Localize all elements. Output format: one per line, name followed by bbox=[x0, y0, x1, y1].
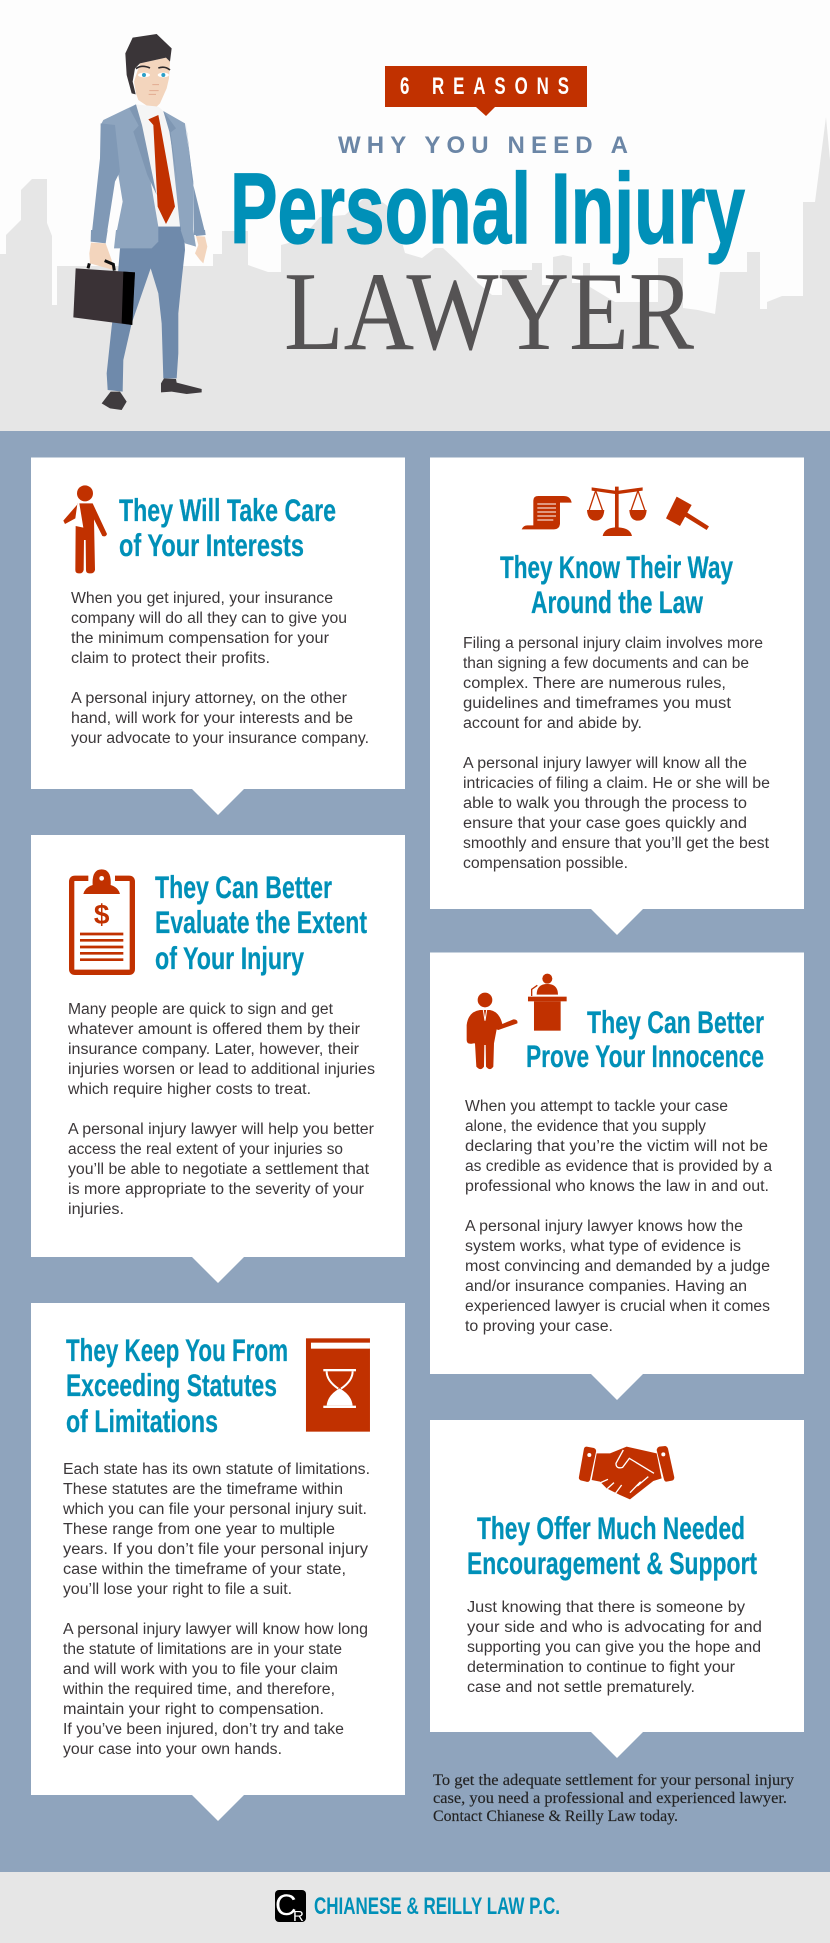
body text: to proving your case. bbox=[465, 1318, 613, 1335]
body text bbox=[67, 1001, 375, 1218]
closing text: case, you need a professional and experienced lawyer. bbox=[433, 1790, 787, 1807]
header background with skyline bbox=[0, 0, 830, 431]
body text: system works, what type of evidence is bbox=[465, 1238, 741, 1255]
body text: determination to continue to fight your bbox=[467, 1659, 735, 1676]
heading bbox=[526, 1004, 764, 1074]
body text: A personal injury lawyer knows how the bbox=[465, 1218, 743, 1235]
body text: case and not settle prematurely. bbox=[467, 1679, 695, 1696]
body text bbox=[467, 1599, 762, 1696]
body text bbox=[463, 635, 770, 872]
heading bbox=[155, 869, 367, 976]
body text: Just knowing that there is someone by bbox=[467, 1599, 745, 1616]
body text: insurance company. Later, however, their bbox=[68, 1041, 359, 1058]
panel: statutes of limitations bbox=[31, 1303, 405, 1821]
icon: presenter bbox=[467, 993, 517, 1069]
icon: scales bbox=[587, 487, 647, 536]
logo: R bbox=[293, 1908, 304, 1925]
panel: prove your innocence bbox=[430, 952, 804, 1400]
logo bbox=[275, 1889, 306, 1925]
logo: C bbox=[275, 1889, 297, 1922]
body text: smoothly and ensure that you’ll get the best bbox=[463, 835, 770, 852]
body text: your advocate to your insurance company. bbox=[71, 730, 369, 747]
body text: A personal injury attorney, on the other bbox=[71, 690, 347, 707]
body text: your case into your own hands. bbox=[63, 1741, 282, 1758]
heading bbox=[119, 492, 336, 563]
heading: of Your Interests bbox=[119, 527, 304, 563]
body text: able to walk you through the process to bbox=[463, 795, 747, 812]
lawyer legs, hands and briefcase bbox=[73, 230, 207, 410]
firm name: CHIANESE & REILLY LAW P.C. bbox=[314, 1893, 560, 1920]
icon: podium bbox=[528, 974, 567, 1031]
badge: 6 reasons bbox=[385, 66, 587, 116]
body text: claim to protect their profits. bbox=[71, 650, 270, 667]
panel: encouragement and support bbox=[430, 1420, 804, 1758]
body text: intricacies of filing a claim. He or she will be bbox=[463, 775, 770, 792]
body text bbox=[465, 1098, 772, 1335]
body text: years. If you don’t file your personal injury bbox=[63, 1541, 368, 1558]
illustration: lawyer with briefcase bbox=[73, 34, 207, 410]
body text: When you attempt to tackle your case bbox=[465, 1098, 728, 1115]
body text: you’ll be able to negotiate a settlement that bbox=[68, 1161, 370, 1178]
body text: When you get injured, your insurance bbox=[71, 590, 333, 607]
body text: A personal injury lawyer will know how long bbox=[63, 1621, 368, 1638]
footer bbox=[0, 1872, 830, 1943]
heading: They Know Their Way bbox=[500, 549, 733, 585]
icon: scroll bbox=[522, 496, 572, 529]
body text: most convincing and demanded by a judge bbox=[465, 1258, 770, 1275]
heading: Around the Law bbox=[531, 584, 703, 620]
body text: Each state has its own statute of limitations. bbox=[63, 1461, 370, 1478]
body text: supporting you can give you the hope and bbox=[467, 1639, 761, 1656]
body text: the statute of limitations are in your state bbox=[63, 1641, 342, 1658]
body text: Filing a personal injury claim involves more bbox=[463, 635, 763, 652]
body text: declaring that you’re the victim will not be bbox=[465, 1138, 768, 1155]
icon: handshake bbox=[579, 1446, 674, 1499]
body text: injuries worsen or lead to additional injuries bbox=[68, 1061, 375, 1078]
body text: and/or insurance companies. Having an bbox=[465, 1278, 747, 1295]
body text: alone, the evidence that you supply bbox=[465, 1118, 706, 1135]
title: lawyer: LAWYER bbox=[284, 250, 694, 374]
body text: maintain your right to compensation. bbox=[63, 1701, 324, 1718]
panel: evaluate the extent of your injury bbox=[31, 835, 405, 1283]
body text: the minimum compensation for your bbox=[71, 630, 329, 647]
body text: as credible as evidence that is provided by a bbox=[465, 1158, 772, 1175]
heading: They Will Take Care bbox=[119, 492, 336, 528]
heading: They Can Better bbox=[155, 869, 332, 905]
badge: 6 reasons: 6 REASONS bbox=[400, 73, 578, 100]
icon: injured person bbox=[63, 485, 107, 573]
heading: Evaluate the Extent bbox=[155, 904, 367, 940]
body text bbox=[62, 1461, 370, 1758]
icon: gavel bbox=[666, 497, 709, 530]
panel: know their way around the law bbox=[430, 458, 804, 935]
icon: clipboard with dollar sign bbox=[72, 869, 132, 972]
body text: A personal injury lawyer will know all the bbox=[463, 755, 747, 772]
heading bbox=[66, 1332, 288, 1439]
subtitle: why you need a: WHY YOU NEED A bbox=[338, 132, 628, 159]
closing text: To get the adequate settlement for your personal injury bbox=[433, 1772, 794, 1789]
body text: access the real extent of your injuries so bbox=[68, 1141, 343, 1158]
body text: If you’ve been injured, don’t try and take bbox=[63, 1721, 344, 1738]
heading: of Limitations bbox=[66, 1403, 218, 1439]
body text: which you can file your personal injury suit. bbox=[62, 1501, 367, 1518]
body text: professional who knows the law in and out. bbox=[465, 1178, 769, 1195]
body text: injuries. bbox=[68, 1201, 124, 1218]
heading: Exceeding Statutes bbox=[66, 1367, 277, 1403]
panel: take care of your interests bbox=[31, 458, 405, 815]
body text: is more appropriate to the severity of your bbox=[68, 1181, 364, 1198]
heading: They Can Better bbox=[587, 1004, 764, 1040]
body text: guidelines and timeframes you must bbox=[463, 695, 732, 712]
heading bbox=[500, 549, 733, 620]
body text: complex. There are numerous rules, bbox=[463, 675, 726, 692]
body text: ensure that your case goes quickly and bbox=[463, 815, 747, 832]
icon: clipboard with dollar sign: $ bbox=[94, 899, 110, 930]
body text: and will work with you to file your claim bbox=[63, 1661, 338, 1678]
body text: than signing a few documents and can be bbox=[463, 655, 749, 672]
body text: case within the timeframe of your state, bbox=[63, 1561, 346, 1578]
body text: These range from one year to multiple bbox=[63, 1521, 335, 1538]
body text: within the required time, and therefore, bbox=[62, 1681, 335, 1698]
body text: which require higher costs to treat. bbox=[67, 1081, 311, 1098]
icon: speaker and podium bbox=[467, 974, 567, 1069]
body text: These statutes are the timeframe within bbox=[63, 1481, 343, 1498]
heading: of Your Injury bbox=[155, 940, 304, 976]
closing text bbox=[433, 1772, 794, 1825]
body text: your side and who is advocating for and bbox=[467, 1619, 762, 1636]
body text: A personal injury lawyer will help you better bbox=[68, 1121, 374, 1138]
icon: scroll, scales and gavel bbox=[522, 487, 709, 536]
closing text: Contact Chianese & Reilly Law today. bbox=[433, 1808, 678, 1825]
body text: you’ll lose your right to file a suit. bbox=[63, 1581, 292, 1598]
heading bbox=[467, 1510, 757, 1581]
body text: Many people are quick to sign and get bbox=[68, 1001, 334, 1018]
body text: account for and abide by. bbox=[463, 715, 642, 732]
heading: They Keep You From bbox=[66, 1332, 288, 1368]
body text bbox=[71, 590, 369, 747]
body text: hand, will work for your interests and be bbox=[71, 710, 353, 727]
body text: company will do all they can to give you bbox=[71, 610, 347, 627]
icon: book with hourglass bbox=[306, 1338, 370, 1432]
body text: whatever amount is offered them by their bbox=[67, 1021, 360, 1038]
body text: compensation possible. bbox=[463, 855, 628, 872]
blue content background bbox=[0, 431, 830, 1872]
lawyer upper body bbox=[92, 34, 206, 235]
body text: experienced lawyer is crucial when it comes bbox=[465, 1298, 770, 1315]
